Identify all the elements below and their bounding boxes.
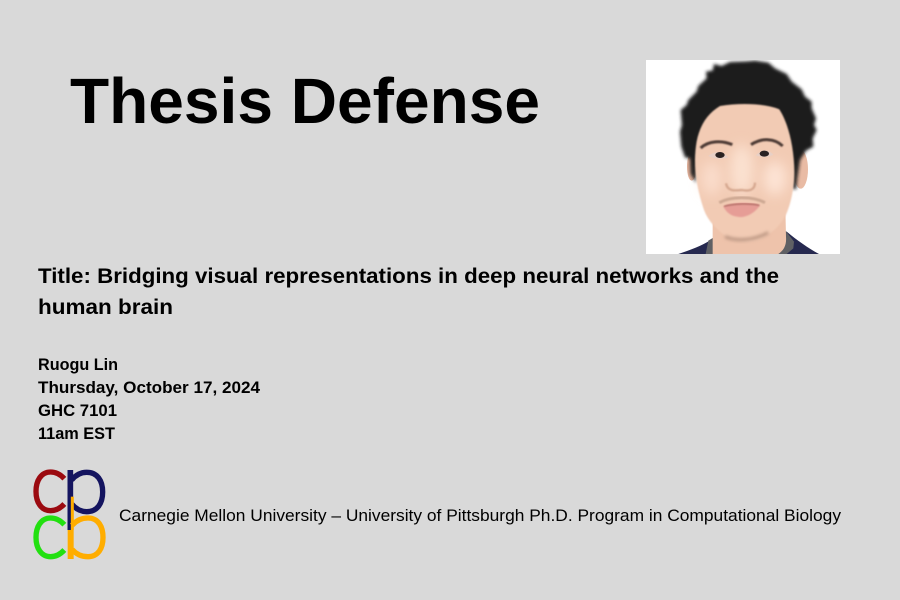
event details: Thursday, October 17, 2024: [38, 379, 261, 397]
event details: Ruogu Lin: [38, 356, 118, 374]
eyebrows: [701, 142, 732, 148]
letter p navy: [70, 470, 103, 530]
letter c red: [36, 472, 64, 511]
letter b orange: [71, 497, 103, 559]
talk title: human brain: [38, 296, 173, 319]
program affiliation: Carnegie Mellon University – University of Pittsburgh Ph.D. Program in Computational Biology: [119, 507, 842, 525]
nose: [726, 183, 755, 191]
photo: portrait of Ruogu Lin: [646, 60, 840, 254]
talk title: [38, 265, 779, 319]
title: Thesis Defense: [70, 65, 540, 137]
sweater: [678, 232, 819, 254]
mouth: [723, 203, 760, 217]
talk title: Title: Bridging visual representations in deep neural networks and the: [38, 265, 779, 288]
neck: [712, 214, 786, 254]
event details: [38, 356, 261, 443]
letter c green: [36, 518, 64, 557]
chin stubble: [725, 233, 768, 240]
logo: cpcb: [36, 470, 103, 559]
eyes: [708, 151, 773, 159]
event details: 11am EST: [38, 425, 115, 443]
ears: [687, 156, 696, 181]
face highlights: [702, 145, 787, 195]
moustache: [719, 198, 765, 203]
hair: [680, 61, 817, 189]
face: [695, 104, 794, 242]
event details: GHC 7101: [38, 402, 117, 420]
